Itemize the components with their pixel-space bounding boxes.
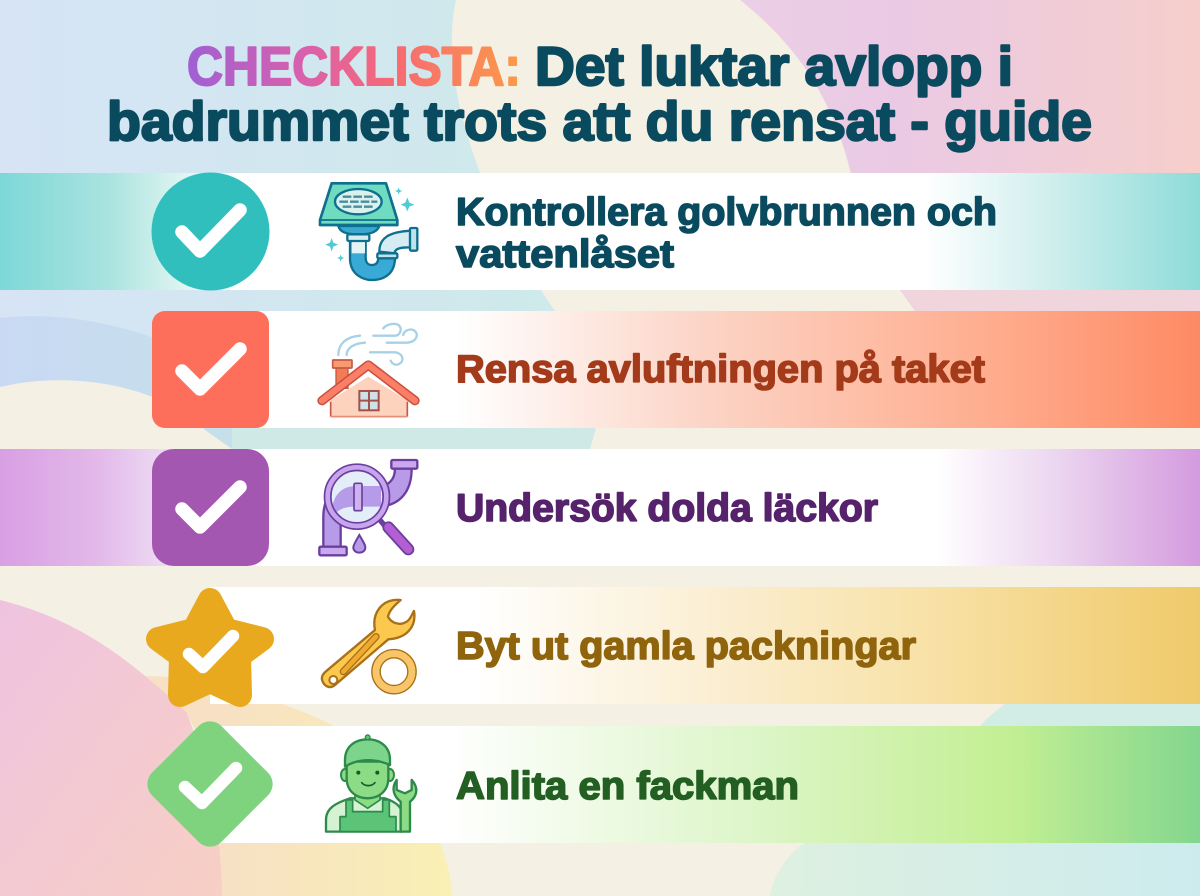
row 5 text: Anlita en fackman: [456, 765, 799, 808]
title: [107, 35, 1092, 152]
icon: wrench and gasket ring: [322, 600, 414, 690]
row 1 text: Kontrollera golvbrunnen och: [456, 191, 997, 234]
row 5 band: [210, 726, 1200, 843]
check badge: green diamond: [141, 715, 279, 853]
title: badrummet trots att du rensat - guide: [107, 90, 1092, 152]
row 3 text: Undersök dolda läckor: [456, 487, 878, 530]
row 1 band: [0, 173, 1200, 290]
title: Det luktar avlopp i: [535, 35, 1013, 97]
row 1 text: vattenlåset: [456, 233, 674, 276]
check badge: purple rounded square: [152, 449, 269, 566]
check badge: teal circle: [152, 172, 270, 290]
row 2 band: [210, 311, 1200, 428]
check badge: coral square: [152, 311, 269, 428]
row 3 band: [0, 449, 1200, 566]
icon: tradesman with wrench: [326, 735, 416, 832]
row 1 text: [456, 191, 997, 276]
icon: magnifying glass over leaking pipe: [319, 460, 417, 555]
check badge: gold star: [158, 600, 262, 695]
icon: house roof with vent and wind: [322, 324, 417, 417]
row 2 text: Rensa avluftningen på taket: [456, 348, 985, 391]
row 4 band: [210, 587, 1200, 704]
row 4 text: Byt ut gamla packningar: [456, 625, 916, 668]
title: CHECKLISTA:: [187, 35, 521, 97]
icon: floor drain and trap: [320, 183, 417, 280]
